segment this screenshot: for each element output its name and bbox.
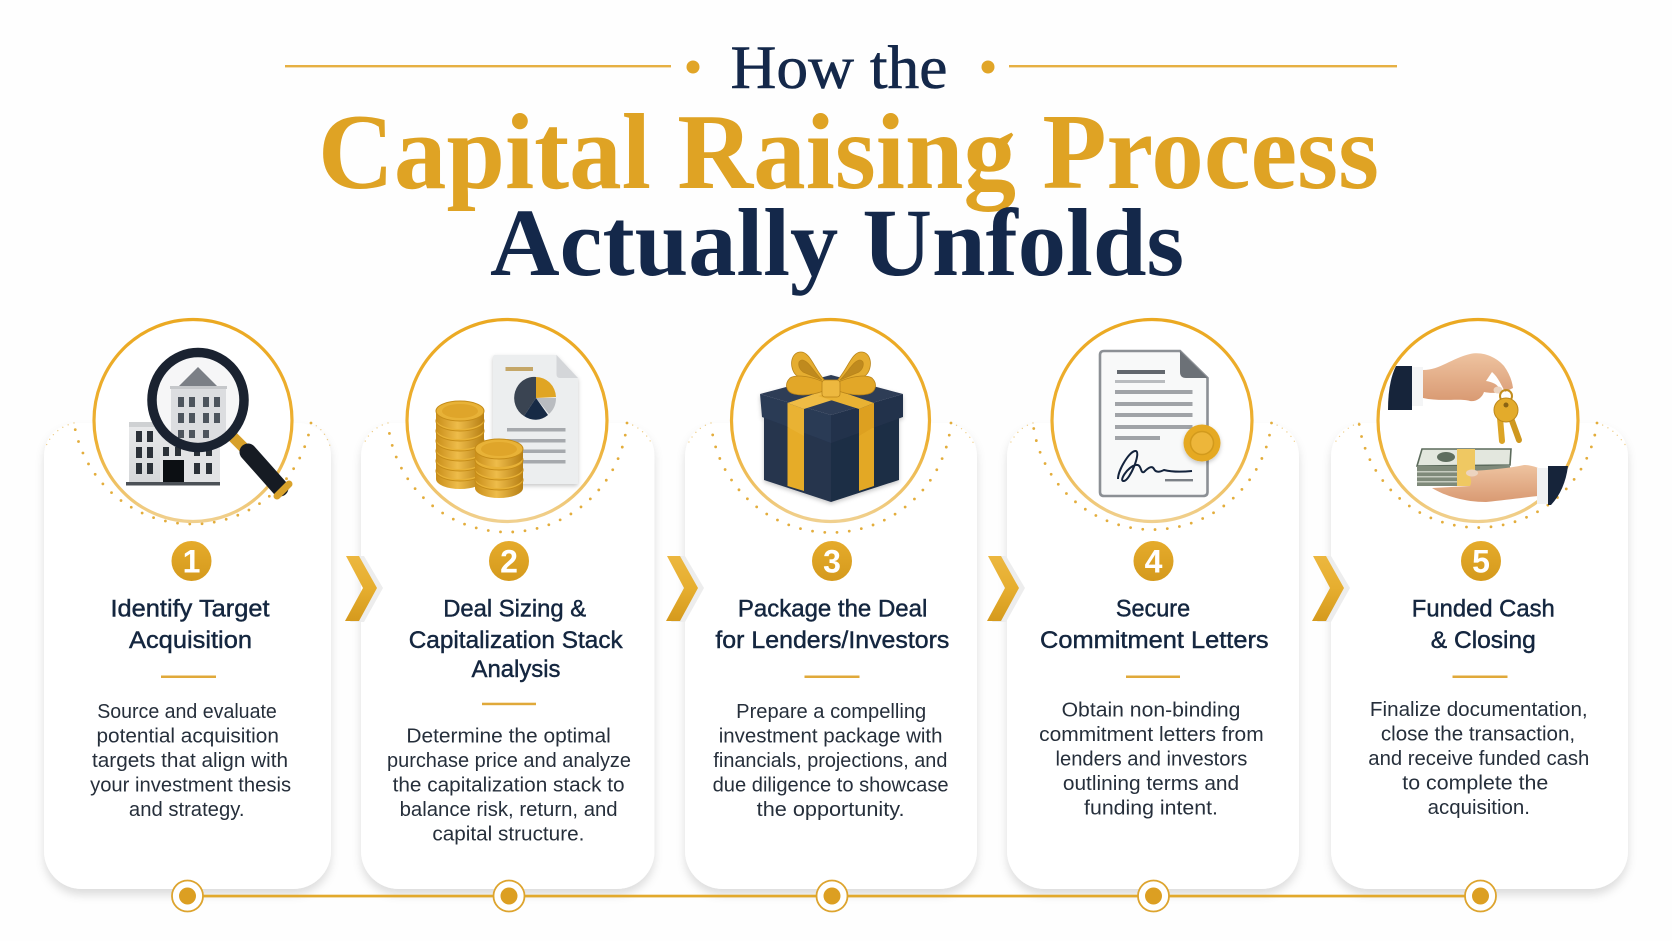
step 3 heading: Package the Deal (738, 596, 927, 623)
step number 2: 2 (500, 544, 518, 580)
dotted arc 2 (363, 423, 653, 532)
step number 5: 5 (1472, 544, 1490, 580)
ring 4 (1052, 320, 1252, 522)
card 2 (361, 423, 654, 889)
title ornament rule right (982, 60, 1397, 74)
step 1 body: your investment thesis (90, 774, 291, 796)
arrow 2 (666, 556, 704, 622)
step 1 body (90, 701, 291, 821)
icon: building under magnifying glass (126, 352, 289, 496)
node 1 (172, 880, 203, 912)
step 4 body: commitment letters from (1039, 724, 1264, 746)
step 4 body: Obtain non-binding (1062, 700, 1240, 722)
step 4 divider (1126, 676, 1180, 678)
dotted arc 5 (1333, 423, 1626, 528)
step 2 divider (482, 703, 536, 705)
card 4 (1007, 423, 1299, 889)
step number 5 (1460, 540, 1502, 582)
step 5 body: close the transaction, (1381, 724, 1575, 746)
step 4 heading: Secure (1116, 596, 1190, 623)
step 3 body: Prepare a compelling (736, 701, 926, 723)
step 2 body: Determine the optimal (406, 726, 611, 748)
step 1 heading: Identify Target (110, 596, 270, 623)
title block (285, 35, 1397, 296)
step 3 body: financials, projections, and (713, 750, 947, 772)
step 5 divider (1452, 676, 1508, 678)
step 2 heading: Analysis (472, 656, 560, 683)
step number 3: 3 (823, 544, 841, 580)
card 1 (44, 423, 331, 889)
node 4 (1138, 880, 1169, 912)
node 5 (1465, 880, 1496, 912)
step number 1 (170, 540, 213, 582)
step 1 body: Source and evaluate (97, 701, 277, 723)
panel: step 4 (1007, 320, 1299, 889)
title line: Capital Raising Process: Capital Raising Process (318, 93, 1379, 212)
step number 3 (810, 540, 854, 582)
step 1 divider (161, 676, 216, 678)
step 5 body (1368, 699, 1589, 819)
timeline (172, 880, 1496, 912)
step 2 heading (409, 596, 623, 683)
panel: step 3 (685, 320, 977, 889)
dotted arc 3 (687, 423, 975, 533)
icon: hands exchanging keys and cash (1388, 353, 1568, 505)
step 2 body: capital structure. (432, 824, 584, 846)
node 3 (816, 880, 848, 912)
arrow 4 (1312, 556, 1350, 622)
step 1 heading: Acquisition (129, 627, 252, 654)
step 4 body: outlining terms and (1063, 773, 1239, 795)
step 3 divider (804, 676, 860, 678)
step 5 body: acquisition. (1428, 797, 1530, 819)
panel: step 5 (1331, 320, 1628, 889)
bow (787, 352, 875, 397)
ring 5 (1378, 320, 1578, 522)
icon: signed commitment letter with seal (1100, 351, 1220, 496)
icon: document with pie chart and coins (436, 355, 578, 498)
ring 1 (94, 320, 292, 522)
step 1 body: targets that align with (92, 750, 288, 772)
step number 4 (1132, 540, 1175, 582)
step number 2 (488, 540, 530, 582)
step 1 heading (110, 596, 270, 654)
step 4 body (1039, 700, 1264, 820)
step 5 body: Finalize documentation, (1370, 699, 1588, 721)
step 2 body: purchase price and analyze (387, 750, 631, 772)
card 3 (685, 423, 977, 889)
step number 4: 4 (1145, 544, 1163, 580)
step 5 heading (1412, 596, 1555, 654)
step 1 body: and strategy. (129, 799, 244, 821)
step 3 heading (715, 596, 949, 654)
panel: step 1 (44, 320, 331, 889)
step 4 heading: Commitment Letters (1040, 627, 1269, 654)
timeline line (188, 895, 1480, 897)
ring 3 (732, 320, 930, 522)
step 3 body: the opportunity. (757, 799, 904, 821)
arrow 3 (987, 556, 1025, 622)
title ornament rule left (285, 60, 700, 74)
step 2 heading: Deal Sizing & (443, 596, 586, 623)
ring 2 (407, 320, 607, 522)
step 5 body: and receive funded cash (1368, 748, 1589, 770)
step 5 heading: & Closing (1431, 627, 1536, 654)
title line: How the: How the (730, 35, 948, 102)
step 2 heading: Capitalization Stack (409, 627, 623, 654)
step 5 body: to complete the (1402, 772, 1548, 794)
arrow 1 (345, 556, 383, 622)
step 2 body: the capitalization stack to (393, 774, 625, 796)
ribbon strips (788, 390, 874, 491)
step 2 body (387, 726, 631, 846)
step 3 heading: for Lenders/Investors (715, 627, 949, 654)
step 1 body: potential acquisition (96, 726, 279, 748)
node 2 (494, 880, 524, 912)
dotted arc 1 (46, 423, 330, 524)
step 5 heading: Funded Cash (1412, 596, 1555, 623)
step 4 body: funding intent. (1084, 798, 1218, 820)
step 4 heading (1040, 596, 1269, 654)
step number 1: 1 (183, 544, 200, 580)
dotted arc 4 (1009, 423, 1297, 530)
card 5 (1331, 423, 1628, 889)
step 2 body: balance risk, return, and (400, 799, 618, 821)
step 3 body (713, 701, 949, 821)
panel: step 2 (361, 320, 654, 889)
icon: gift box (760, 352, 903, 502)
title line: Actually Unfolds: Actually Unfolds (490, 189, 1184, 296)
step 4 body: lenders and investors (1056, 749, 1247, 771)
step 3 body: due diligence to showcase (713, 774, 949, 796)
step 3 body: investment package with (719, 726, 942, 748)
